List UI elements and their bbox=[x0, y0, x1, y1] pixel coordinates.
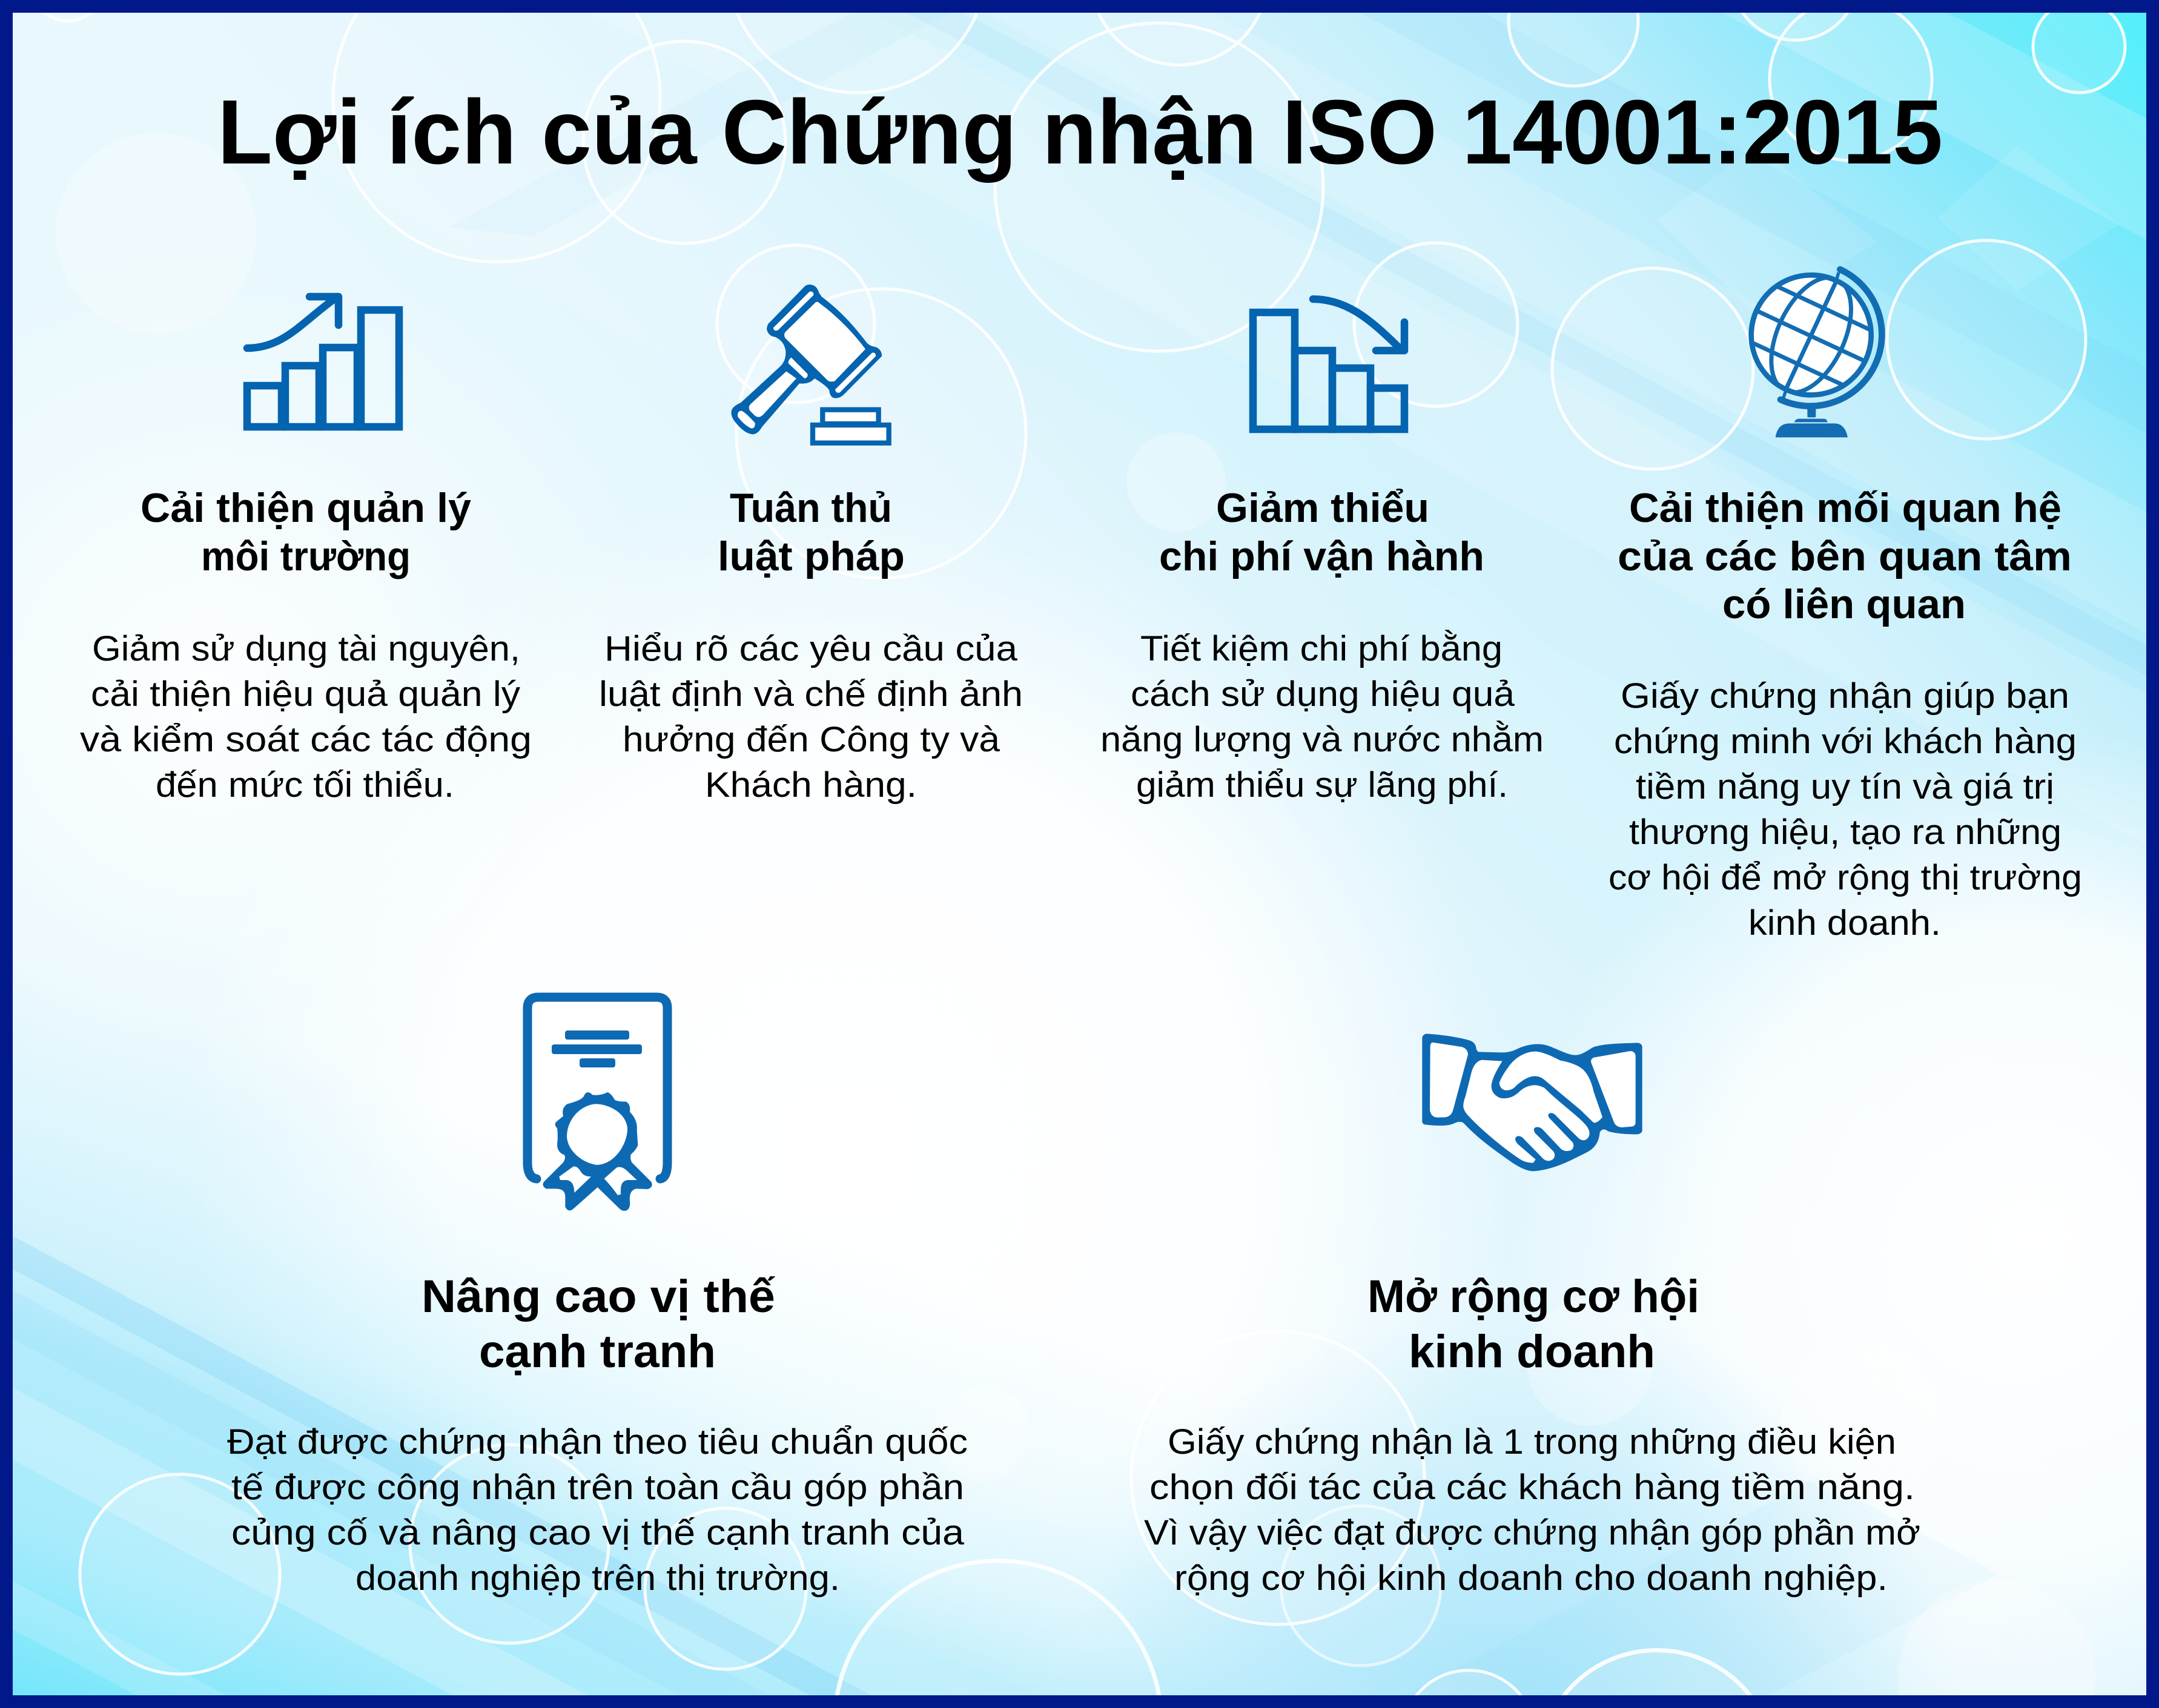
text block: kinh doanh. bbox=[1748, 903, 1941, 943]
text block: năng lượng và nước nhằm bbox=[1100, 720, 1544, 759]
heading: của các bên quan tâm bbox=[1618, 533, 2072, 579]
text block: và kiểm soát các tác động bbox=[80, 720, 532, 759]
heading: môi trường bbox=[201, 533, 411, 579]
text block: Hiểu rõ các yêu cầu của bbox=[604, 629, 1018, 668]
icon: handshake bbox=[1422, 1034, 1642, 1171]
text block: doanh nghiệp trên thị trường. bbox=[355, 1558, 840, 1598]
heading: Cải thiện mối quan hệ bbox=[1629, 485, 2061, 531]
text block bbox=[599, 629, 1023, 805]
text block: tiềm năng uy tín và giá trị bbox=[1636, 767, 2054, 806]
icon: gavel bbox=[731, 285, 889, 443]
panel: stakeholder relations bbox=[1609, 254, 2082, 943]
text block: cách sử dụng hiệu quả bbox=[1131, 674, 1515, 714]
heading: có liên quan bbox=[1722, 581, 1966, 627]
heading: Nâng cao vị thế bbox=[422, 1271, 776, 1322]
panel: business opportunity bbox=[1144, 1034, 1920, 1598]
icon: falling bar chart bbox=[1253, 299, 1404, 429]
text block: đến mức tối thiểu. bbox=[156, 765, 454, 805]
text block: Đạt được chứng nhận theo tiêu chuẩn quốc bbox=[227, 1422, 968, 1462]
text block: Giảm sử dụng tài nguyên, bbox=[92, 629, 520, 668]
heading bbox=[1367, 1271, 1699, 1377]
heading: Tuân thủ bbox=[730, 485, 892, 531]
text block: Tiết kiệm chi phí bằng bbox=[1140, 629, 1503, 668]
text block: cơ hội để mở rộng thị trường bbox=[1609, 858, 2082, 897]
icon: globe bbox=[1748, 266, 1885, 437]
heading: chi phí vận hành bbox=[1159, 533, 1484, 579]
text block: luật định và chế định ảnh bbox=[599, 674, 1023, 714]
icon: certificate bbox=[527, 997, 667, 1211]
heading bbox=[141, 485, 471, 579]
text block: tế được công nhận trên toàn cầu góp phần bbox=[231, 1468, 964, 1507]
text block: chọn đối tác của các khách hàng tiềm năng. bbox=[1149, 1468, 1915, 1507]
text block bbox=[1609, 676, 2082, 943]
heading bbox=[1159, 485, 1484, 579]
panel: environmental management bbox=[80, 297, 532, 805]
heading: Giảm thiểu bbox=[1216, 485, 1429, 531]
icon: rising bar chart bbox=[247, 297, 399, 427]
text block: giảm thiểu sự lãng phí. bbox=[1136, 765, 1508, 805]
heading: kinh doanh bbox=[1409, 1326, 1655, 1377]
text block bbox=[227, 1422, 968, 1598]
text block: Giấy chứng nhận giúp bạn bbox=[1621, 676, 2069, 716]
text block bbox=[1144, 1422, 1920, 1598]
text block: rộng cơ hội kinh doanh cho doanh nghiệp. bbox=[1174, 1558, 1888, 1598]
text block: Vì vậy việc đạt được chứng nhận góp phần mở bbox=[1144, 1513, 1920, 1552]
heading: Cải thiện quản lý bbox=[141, 485, 471, 531]
text block bbox=[80, 629, 532, 805]
title: Lợi ích của Chứng nhận ISO 14001:2015 bbox=[217, 81, 1943, 183]
heading: luật pháp bbox=[718, 533, 905, 579]
text block: Khách hàng. bbox=[705, 765, 917, 805]
heading bbox=[1618, 485, 2072, 627]
panel: legal compliance bbox=[599, 285, 1023, 805]
panel: cost reduction bbox=[1100, 299, 1544, 805]
panel: competitive position bbox=[227, 997, 968, 1598]
text block: hưởng đến Công ty và bbox=[623, 720, 1000, 759]
text block: thương hiệu, tạo ra những bbox=[1629, 813, 2061, 852]
text block bbox=[1100, 629, 1544, 805]
text block: cải thiện hiệu quả quản lý bbox=[91, 674, 520, 714]
heading bbox=[718, 485, 905, 579]
text block: củng cố và nâng cao vị thế cạnh tranh của bbox=[231, 1513, 965, 1552]
heading: Mở rộng cơ hội bbox=[1367, 1271, 1699, 1322]
text block: chứng minh với khách hàng bbox=[1614, 722, 2077, 761]
text block: Giấy chứng nhận là 1 trong những điều kiện bbox=[1168, 1422, 1896, 1462]
heading: cạnh tranh bbox=[479, 1326, 716, 1377]
heading bbox=[422, 1271, 776, 1377]
